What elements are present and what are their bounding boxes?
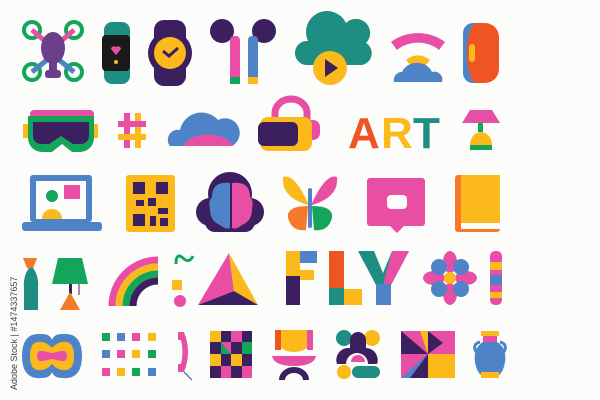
icon: infinity blob [22,334,82,378]
icon: wireless cloud [391,33,445,82]
icon: color grid [102,333,156,376]
icon: butterfly [283,177,337,230]
watermark text: Adobe Stock | #1474337657 [9,277,19,390]
icon: fitness band [102,22,130,84]
icon: vr goggles [23,110,98,152]
icon: drone [24,22,82,80]
icon: squiggle question [172,256,193,307]
icon: blob shapes [336,330,380,379]
icon: geometric tile [401,331,455,378]
text: ART: T [413,109,440,158]
icon: brain cloud [196,172,264,232]
text: FLY [286,251,409,305]
text: ART: R [381,109,413,158]
icon: pattern tile [210,331,252,378]
icon: amphora [475,331,505,378]
text: ART: A [348,109,380,158]
icon: chat bubble [367,178,425,233]
icon: floor lamp [52,258,88,310]
icon: book [455,175,500,232]
icon: earbuds [210,19,276,84]
icon: hashtag [118,113,146,148]
icon: pyramid [198,253,258,305]
icon: table lamp [462,110,500,150]
icon: vr headset [258,99,320,151]
icon: laptop video call [22,175,102,231]
icon: cloud [168,113,240,146]
icon: flower [423,251,477,305]
icon: qr code [126,175,175,232]
icon: rainbow [112,260,158,306]
icon: phone handset [178,332,192,380]
icon: cloud play [295,11,372,85]
icon: striped pole [490,251,502,305]
icon: watch [148,20,192,86]
text: ART [348,109,440,158]
icon: smart band [463,23,499,83]
icon: vase [23,258,38,310]
icon: chair [272,330,316,380]
